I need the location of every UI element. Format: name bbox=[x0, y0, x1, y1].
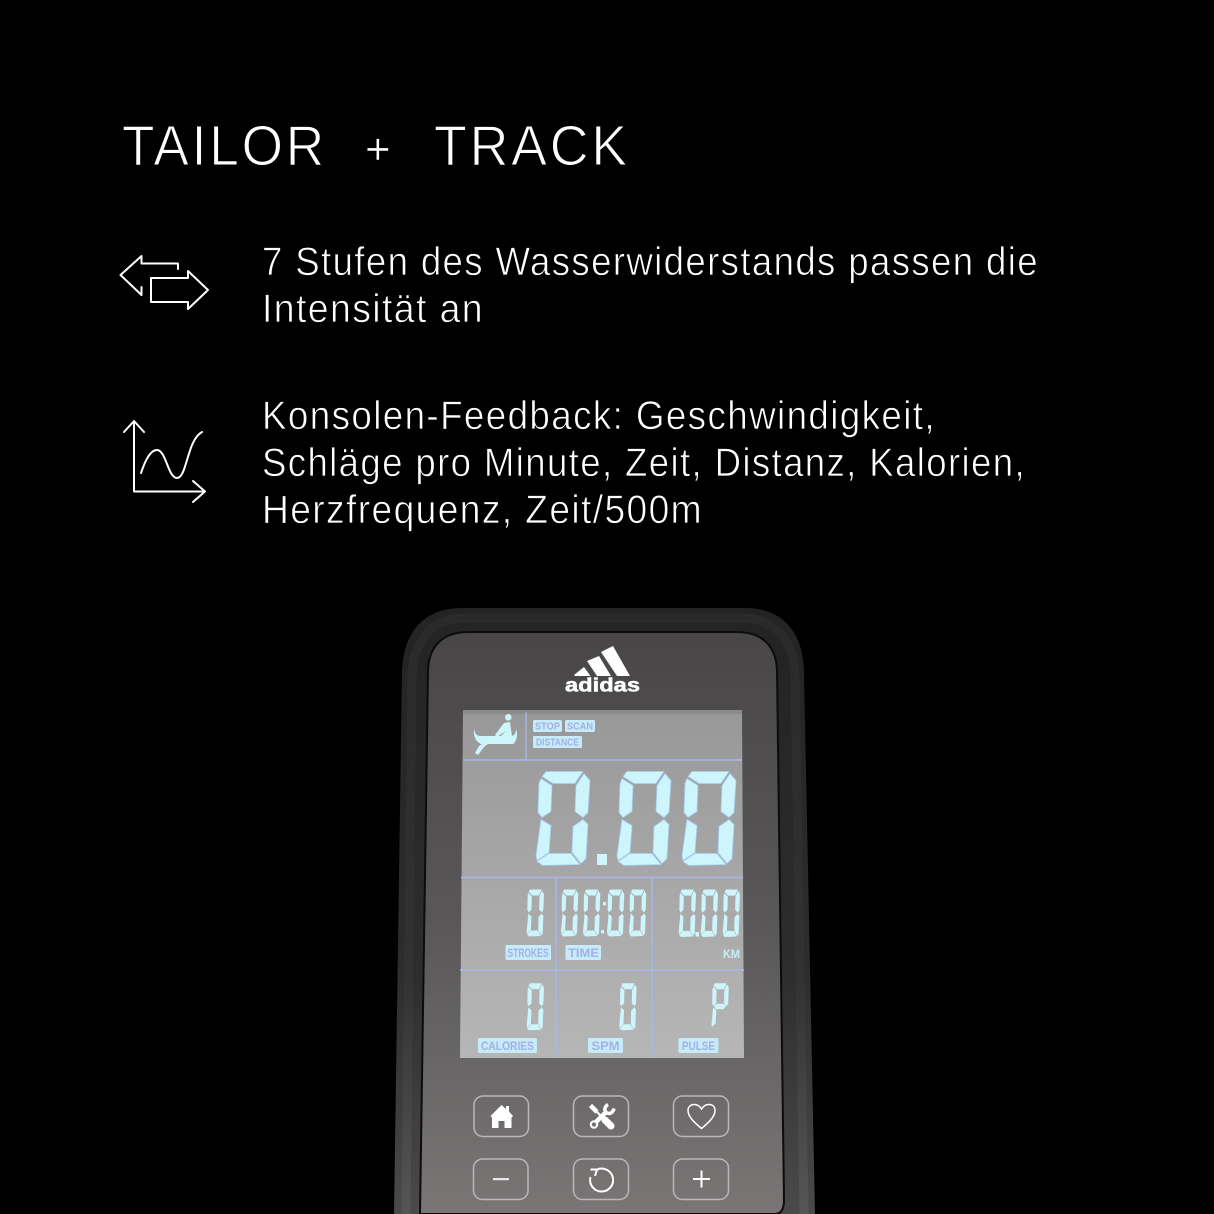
text block: water resistance levels bbox=[262, 240, 1039, 331]
text block: console feedback bbox=[262, 394, 1026, 532]
pulse readout bbox=[678, 983, 729, 1053]
strokes readout bbox=[506, 890, 551, 960]
time readout: TIME bbox=[568, 946, 599, 960]
button: minus bbox=[474, 1159, 528, 1200]
calories readout bbox=[478, 983, 544, 1053]
distance readout: KM bbox=[723, 947, 740, 961]
main readout 0.00 bbox=[536, 772, 736, 866]
title bbox=[122, 114, 630, 178]
button: plus bbox=[674, 1159, 728, 1200]
spm readout bbox=[588, 983, 637, 1053]
adidas logo: adidas bbox=[565, 676, 640, 696]
title: TAILOR bbox=[122, 114, 327, 178]
status labels: STOP bbox=[535, 722, 560, 732]
title: + bbox=[365, 125, 391, 174]
text block: console feedback: Schläge pro Minute, Zeit, Distanz, Kalorien, bbox=[262, 441, 1026, 485]
LCD screen bbox=[460, 710, 744, 1058]
console housing bbox=[394, 608, 815, 1214]
text block: console feedback: Konsolen-Feedback: Geschwindigkeit, bbox=[262, 394, 936, 438]
pulse readout: PULSE bbox=[682, 1039, 715, 1053]
time readout bbox=[561, 890, 646, 960]
adidas logo bbox=[565, 646, 640, 696]
button: heart bbox=[674, 1096, 728, 1136]
icon: rowing boat bbox=[474, 714, 517, 755]
housing ridge bbox=[406, 618, 804, 1214]
status labels: DISTANCE bbox=[536, 738, 579, 748]
spm readout: SPM bbox=[592, 1039, 620, 1053]
status labels: SCAN bbox=[567, 722, 593, 732]
icon: line chart bbox=[124, 421, 205, 502]
console bbox=[394, 608, 815, 1214]
text block: water resistance levels: 7 Stufen des Wasserwiderstands passen die bbox=[262, 240, 1039, 284]
text block: water resistance levels: Intensität an bbox=[262, 287, 484, 331]
icon: opposing arrows bbox=[120, 256, 208, 309]
strokes readout: STROKES bbox=[508, 946, 548, 960]
calories readout: CALORIES bbox=[481, 1039, 534, 1053]
button: settings tools bbox=[574, 1096, 628, 1136]
title: TRACK bbox=[434, 114, 630, 178]
distance readout bbox=[679, 890, 740, 961]
button: home bbox=[474, 1096, 528, 1136]
button: reset bbox=[574, 1159, 628, 1200]
status labels bbox=[533, 720, 595, 748]
text block: console feedback: Herzfrequenz, Zeit/500m bbox=[262, 488, 703, 532]
console face bbox=[420, 632, 784, 1214]
